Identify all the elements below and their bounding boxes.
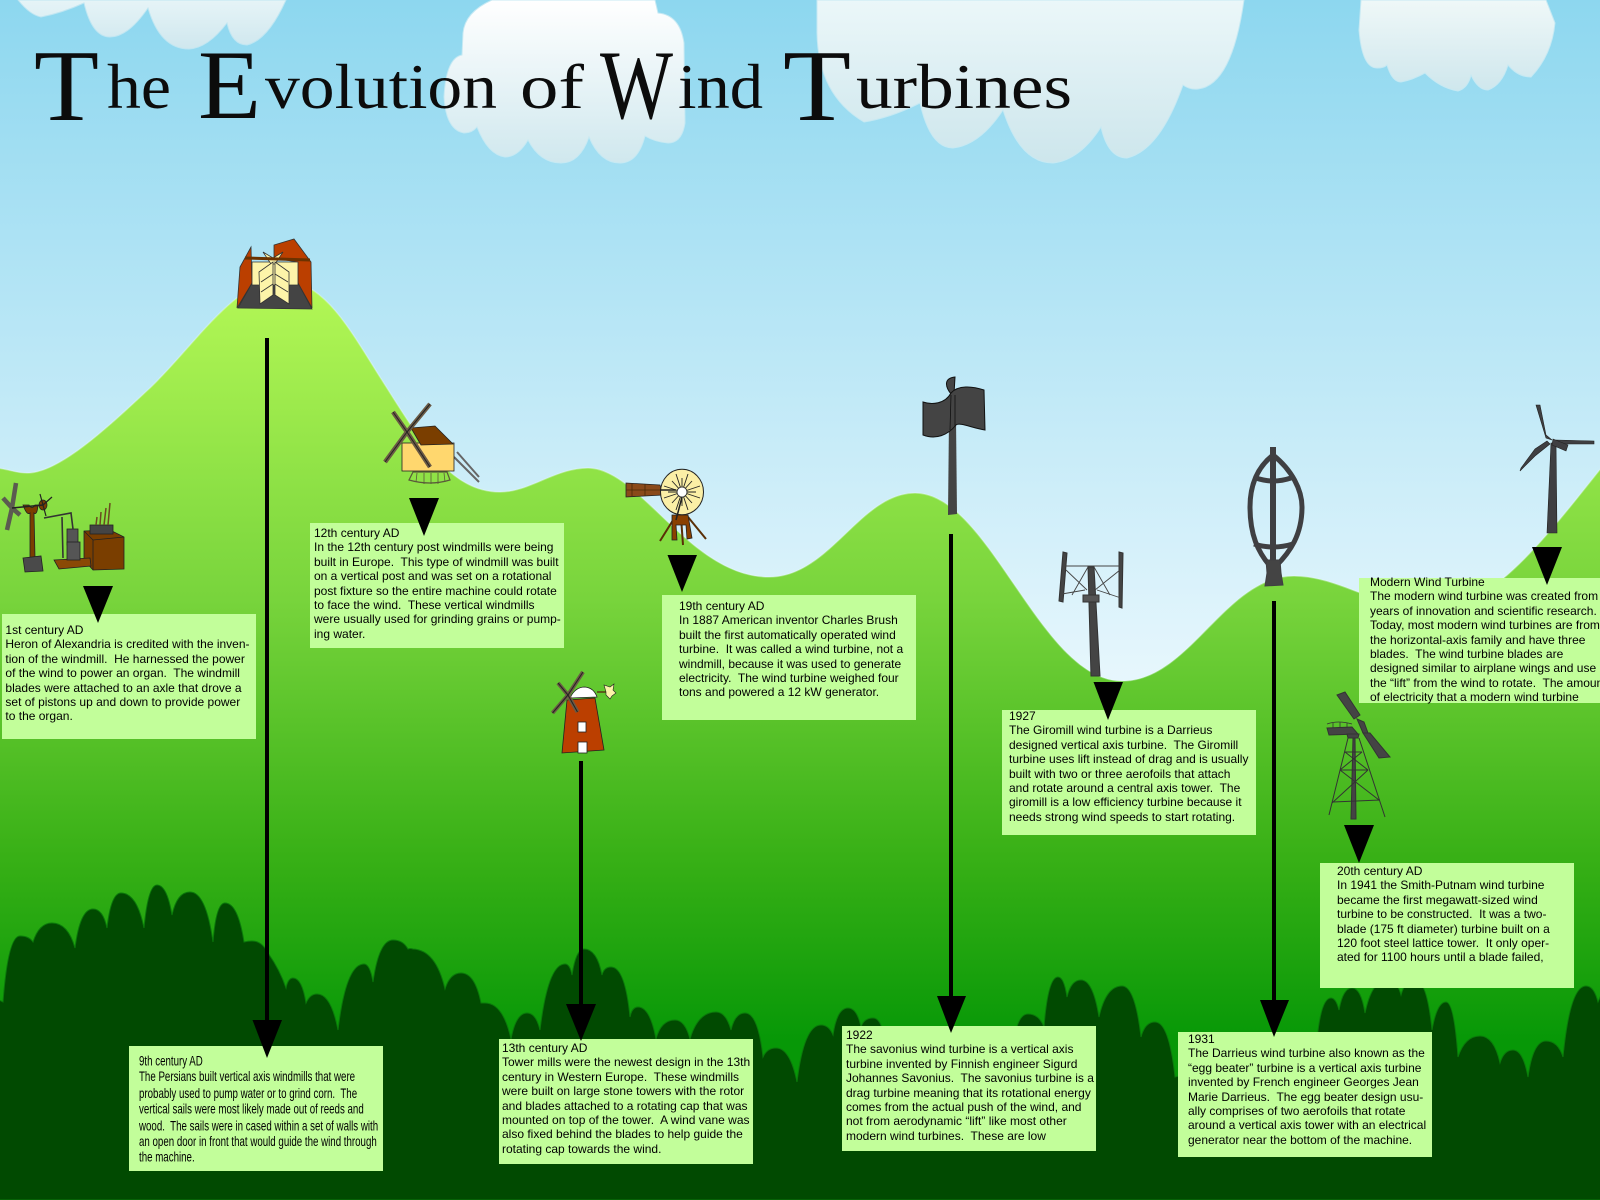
- green hills: [0, 280, 1600, 1200]
- title: volution: [265, 51, 497, 122]
- text block: 20th century AD: 20th century AD In 1941 the Smith-Putnam wind turbine became the first megawatt-sized wind turbine to be constructed. It was a two- blade (175 ft diameter) turbine built on a 120 foot steel lattice tower. It only oper- ated for 1100 hours until a blade failed,: [1337, 864, 1550, 964]
- icon: modern wind turbine: [1520, 405, 1594, 533]
- title: T: [783, 30, 851, 143]
- text block: 19th century AD: 19th century AD In 1887 American inventor Charles Brush built the first automatically operated wind turbine. It was called a wind turbine, not a windmill, because it was used to generate electricity. The wind turbine weighed four tons and powered a 12 kW generator.: [679, 599, 903, 699]
- title: of: [520, 51, 585, 122]
- cloud: top right: [1359, 0, 1555, 91]
- arrow: Persian windmill to 9th century text: [252, 338, 282, 1058]
- text block: 12th century AD: 12th century AD In the 12th century post windmills were being built in Europe. This type of windmill was built on a vertical post and was set on a rotational post fixture so the entire machine could rotate to face the wind. These vertical windmills were usually used for grinding grains or pump- ing water.: [314, 526, 561, 641]
- arrow: tower mill to 13th century text: [566, 761, 596, 1041]
- text block: Modern Wind Turbine: Modern Wind Turbine The modern wind turbine was created from years of innovation and scientific research. Today, most modern wind turbines are from the horizontal-axis family and have three blades. The wind turbine blades are designed similar to airplane wings and use the “lift” from the wind to rotate. The amount of electricity that a modern wind turbine: [1370, 575, 1600, 704]
- title: ind: [678, 51, 763, 122]
- title: W: [600, 31, 673, 140]
- arrow: modern turbine to modern text: [1532, 547, 1562, 585]
- icon: Darrieus egg beater turbine: [1250, 447, 1302, 586]
- icon: Savonius turbine: [923, 377, 985, 515]
- text block: 1st century AD: 1st century AD Heron of Alexandria is credited with the inven- tion of the windmill. He harnessed the power of the wind to power an organ. The windmill blades were attached to an axle that drove a set of pistons up and down to provide power to the organ.: [5, 623, 250, 723]
- text block: 13th century AD: 13th century AD Tower mills were the newest design in the 13th century in Western Europe. These windmills were built on large stone towers with the rotor and blades attached to a rotating cap that was mounted on top of the tower. A wind vane was also fixed behind the blades to help guide the rotating cap towards the wind.: [502, 1041, 750, 1156]
- icon: Smith-Putnam lattice turbine: [1327, 692, 1390, 819]
- cloud: top left: [18, 0, 286, 49]
- title: T: [34, 30, 99, 143]
- title: urbines: [856, 51, 1072, 122]
- text block: 1931: 1931 The Darrieus wind turbine also known as the “egg beater” turbine is a vertical axis turbine invented by French engineer Georges Jean Marie Darrieus. The egg beater design usu- ally comprises of two aerofoils that rotate around a vertical axis tower with an electrical generator near the bottom of the machine.: [1188, 1032, 1426, 1147]
- icon: tower windmill: [552, 672, 616, 753]
- arrow: Smith-Putnam to 20th century text: [1344, 825, 1374, 863]
- title: E: [198, 31, 261, 140]
- icon: Persian vertical axis windmill: [237, 239, 312, 309]
- text block: 9th century AD: 9th century AD The Persians built vertical axis windmills that were probably used to pump water or to grind corn. The vertical sails were most likely made out of reeds and wood. The sails were in cased within a set of walls with an open door in front that would guide the wind through the machine.: [139, 1053, 378, 1165]
- arrow: post mill to 12th century text: [409, 498, 439, 536]
- text block: 20th century AD: [1320, 863, 1574, 988]
- dark green forest silhouette: [0, 885, 1600, 1200]
- text block: 1922: 1922 The savonius wind turbine is a vertical axis turbine invented by Finnish engineer Sigurd Johannes Savonius. The savonius turbine is a drag turbine meaning that its rotational energy comes from the actual push of the wind, and not from aerodynamic “lift” like most other modern wind turbines. These are low: [846, 1028, 1094, 1143]
- icon: Giromill turbine: [1059, 552, 1123, 676]
- arrow: Darrieus to 1931 text: [1260, 601, 1289, 1037]
- arrow: Brush turbine to 19th century text: [668, 555, 697, 592]
- arrow: Giromill to 1927 text: [1094, 682, 1123, 720]
- icon: Brush wind turbine: [626, 469, 706, 545]
- icon: Heron organ windmill: [3, 483, 124, 572]
- title: he: [107, 51, 171, 122]
- arrow: Savonius to 1922 text: [937, 534, 966, 1033]
- cloud: behind title left: [444, 0, 685, 163]
- arrow: Heron to 1st century text: [83, 586, 113, 623]
- text block: 1927: 1927 The Giromill wind turbine is a Darrieus designed vertical axis turbine. The Giromill turbine uses lift instead of drag and is usually built with two or three aerofoils that attach and rotate around a central axis tower. The giromill is a low efficiency turbine because it needs strong wind speeds to start rotating.: [1009, 709, 1248, 824]
- cloud: behind title right: [817, 0, 1244, 163]
- icon: post windmill: [385, 404, 479, 484]
